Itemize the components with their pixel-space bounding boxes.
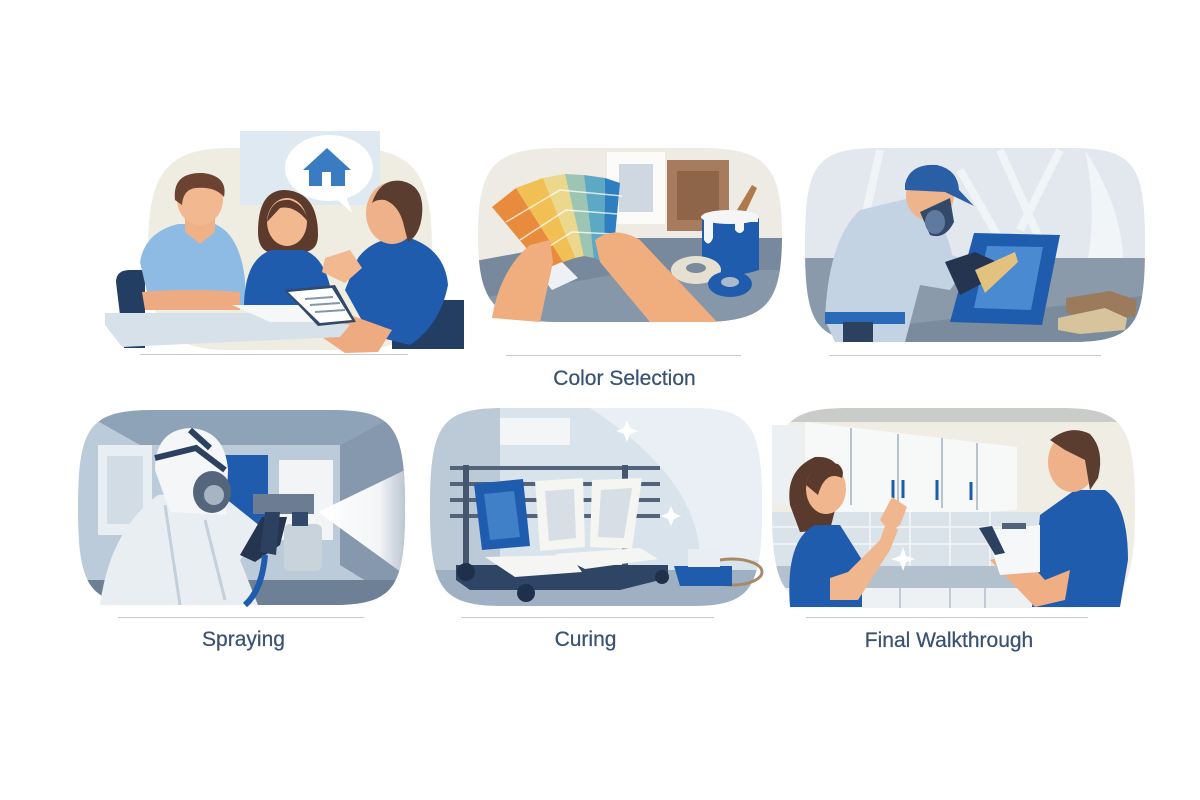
white upper cabinets [772,422,1017,512]
person: inspector [990,430,1128,607]
white cabinet door [607,152,665,224]
drying rack [450,465,669,602]
white door [535,478,585,551]
supplies [674,549,762,586]
workbench [800,258,1150,345]
panel background: plastic sheeting [805,148,1145,342]
plastic folds [860,150,1060,240]
hands [492,232,717,322]
panel background [430,408,762,606]
panel: surface preparation [800,148,1150,345]
painter in protective suit [100,428,287,605]
sparkle [891,547,915,571]
white door [279,460,333,540]
panel: curing [425,408,765,610]
painter [825,165,1018,342]
person: woman [789,457,907,607]
divider 2 [506,354,741,356]
panel: consultation [105,131,464,353]
panel background [772,408,1135,608]
panel background [478,148,782,322]
panel: spraying [78,410,405,610]
divider 6 [806,616,1088,618]
speech bubble backdrop [240,131,380,205]
person: woman [244,190,332,305]
blue door [225,455,268,524]
paint swatch fan [492,174,622,290]
white door two [590,478,642,549]
curtains and wall [425,408,500,578]
icon: house speech bubble [285,135,373,213]
spray gun [245,494,322,605]
brown cabinet door [667,160,729,231]
panel background [148,148,432,350]
backsplash [770,512,1040,567]
panel: color selection [470,148,790,330]
heading: curing: Curing [555,628,616,651]
clipboard [979,523,1040,575]
panel: final walkthrough [770,408,1135,610]
divider 5 [461,616,714,618]
heading: color selection: Color Selection [553,367,696,390]
spray beam [318,470,405,575]
panel background [78,410,405,605]
heading: spraying: Spraying [202,628,285,651]
divider 1 [140,354,408,356]
countertop and lower cabinets [776,566,1017,590]
divider 4 [118,616,364,618]
divider 3 [829,354,1101,356]
door on left wall [98,445,152,535]
ceiling vent [500,418,570,445]
paint can [701,185,759,275]
clipboard [284,285,356,326]
flat panels [485,555,582,577]
countertop [479,238,782,322]
sanding blocks [1058,291,1137,334]
person: consultant [290,181,448,353]
chairs [116,270,464,349]
person: man [140,173,245,310]
floor [436,570,757,606]
heading: final walkthrough: Final Walkthrough [865,629,1033,652]
tape rolls [671,256,752,297]
booth ceiling and floor [98,410,384,445]
sparkles [616,420,681,526]
blue door [474,479,530,550]
cabinet door [950,233,1060,325]
upper wall [790,408,1117,422]
table [105,313,350,347]
